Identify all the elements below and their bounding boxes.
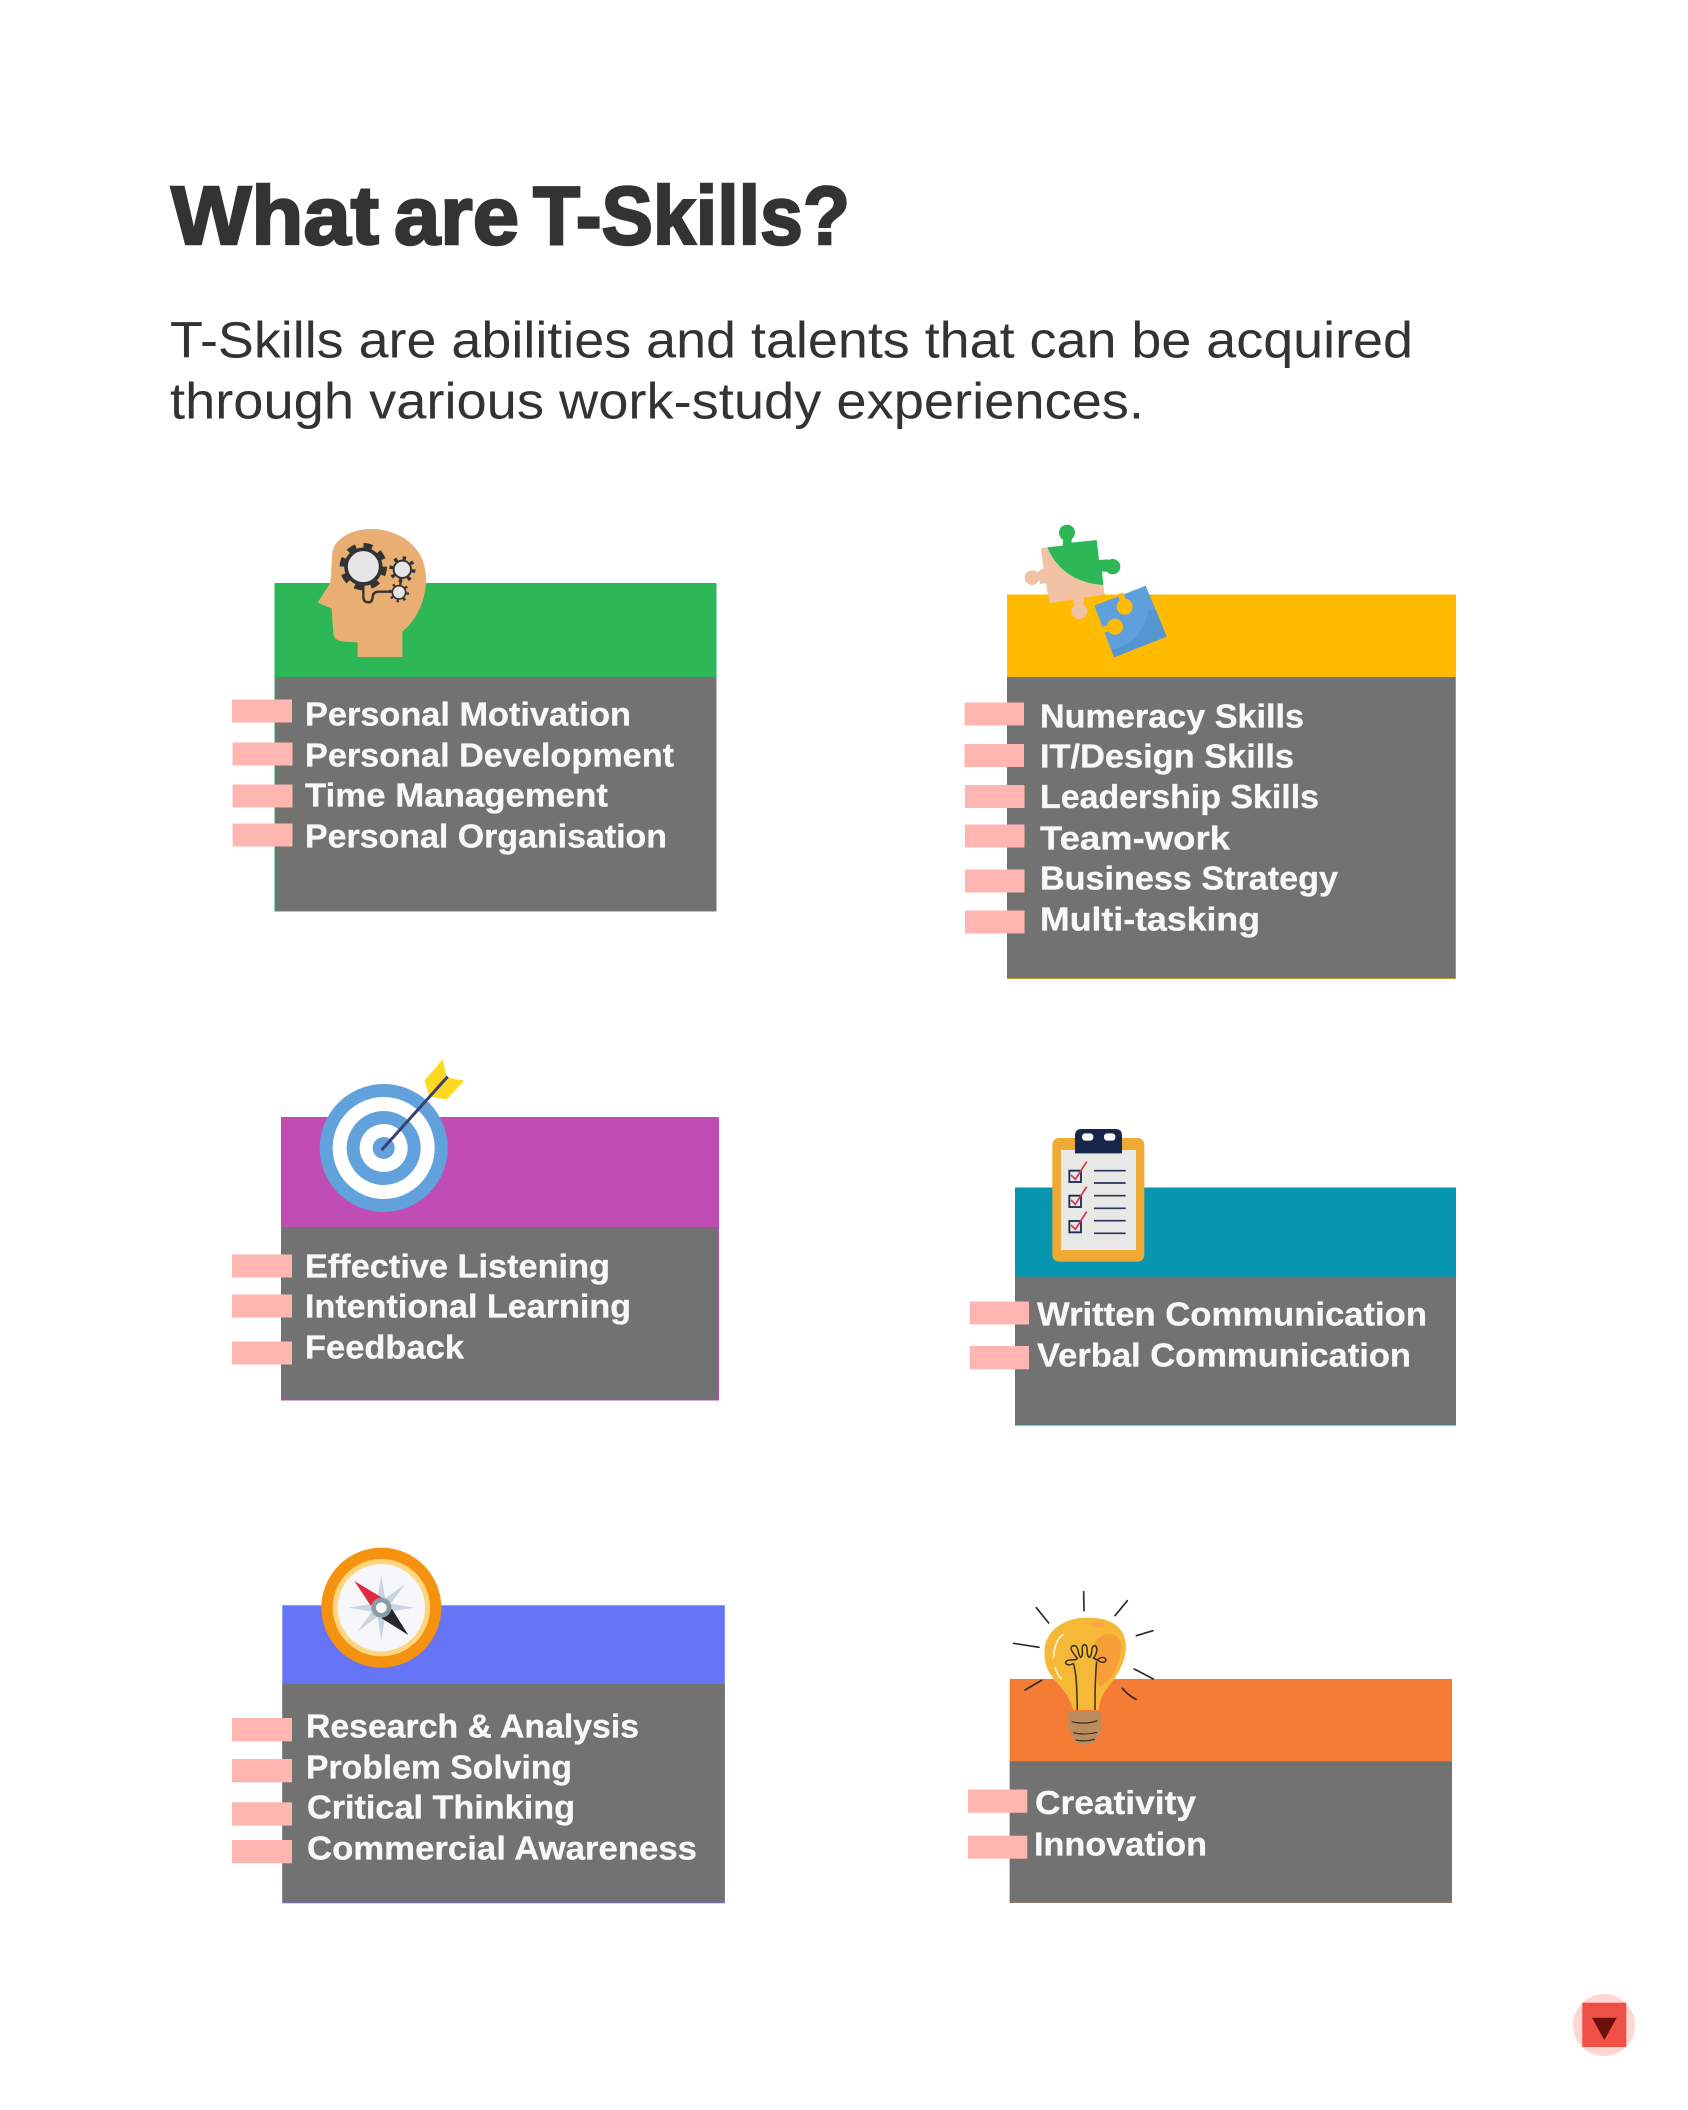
list: communication skills: Written Communication: [1037, 1295, 1427, 1332]
list: professional skills: Team-work: [1040, 820, 1231, 856]
yellow header band: [1007, 594, 1456, 979]
gray list body: [1010, 1761, 1452, 1903]
panel: creative skills: [968, 1592, 1452, 1903]
list: creative skills: Creativity: [1035, 1784, 1197, 1821]
purple header band: [281, 1117, 719, 1400]
panel: professional skills: [964, 525, 1456, 979]
icon: red triangle badge: [1573, 1994, 1635, 2056]
subtitle text block: through various work-study experiences.: [170, 372, 1144, 430]
panel: personal skills: [232, 529, 716, 912]
gray list body: [281, 1227, 718, 1400]
list: personal skills: Time Management: [305, 776, 608, 814]
list: communication skills: Verbal Communication: [1037, 1337, 1411, 1374]
blue header band: [282, 1605, 725, 1903]
list: analytical skills: Critical Thinking: [307, 1789, 575, 1826]
icon: puzzle pieces: [1025, 525, 1167, 657]
title: T-Skills?: [533, 169, 850, 262]
subtitle text block: T-Skills are abilities and talents that can be acquired: [170, 312, 1413, 368]
icon: head with gears: [318, 529, 426, 657]
panel: communication skills: [970, 1129, 1456, 1426]
list: analytical skills: Problem Solving: [306, 1748, 572, 1785]
panel: analytical skills: [232, 1548, 725, 1903]
subtitle text block: [170, 312, 1413, 430]
gray list body: [282, 1684, 725, 1903]
list: analytical skills: Research & Analysis: [306, 1708, 639, 1745]
list: listening and learning skills: Intentional Learning: [305, 1287, 631, 1324]
list: professional skills: IT/Design Skills: [1040, 737, 1294, 774]
list: creative skills: Innovation: [1034, 1825, 1207, 1862]
list: analytical skills: [232, 1708, 697, 1867]
title: are: [394, 169, 519, 262]
title: What: [171, 169, 379, 262]
list: professional skills: Multi-tasking: [1040, 900, 1260, 938]
list: analytical skills: Commercial Awareness: [307, 1830, 697, 1867]
list: personal skills: Personal Organisation: [305, 817, 667, 854]
gray list body: [275, 677, 716, 911]
list: listening and learning skills: [232, 1248, 631, 1365]
list: professional skills: [964, 697, 1339, 938]
icon: compass: [321, 1548, 441, 1668]
list: personal skills: Personal Motivation: [305, 696, 631, 733]
icon: target with arrow: [320, 1059, 464, 1212]
list: personal skills: Personal Development: [305, 736, 674, 773]
title: [171, 169, 850, 262]
list: creative skills: [968, 1784, 1207, 1862]
gray list body: [1016, 1277, 1456, 1425]
panel: listening and learning skills: [232, 1059, 719, 1400]
teal header band: [1015, 1188, 1456, 1426]
list: personal skills: [232, 696, 674, 854]
icon: light bulb: [1014, 1592, 1153, 1745]
list: professional skills: Business Strategy: [1040, 860, 1339, 897]
list: professional skills: Leadership Skills: [1040, 778, 1319, 815]
list: professional skills: Numeracy Skills: [1040, 697, 1304, 734]
orange header band: [1010, 1679, 1452, 1903]
gray list body: [1007, 677, 1456, 978]
green header band: [274, 583, 716, 912]
list: listening and learning skills: Effective Listening: [305, 1248, 610, 1285]
list: listening and learning skills: Feedback: [305, 1328, 465, 1365]
icon: clipboard checklist: [1052, 1129, 1144, 1262]
list: communication skills: [970, 1295, 1427, 1374]
